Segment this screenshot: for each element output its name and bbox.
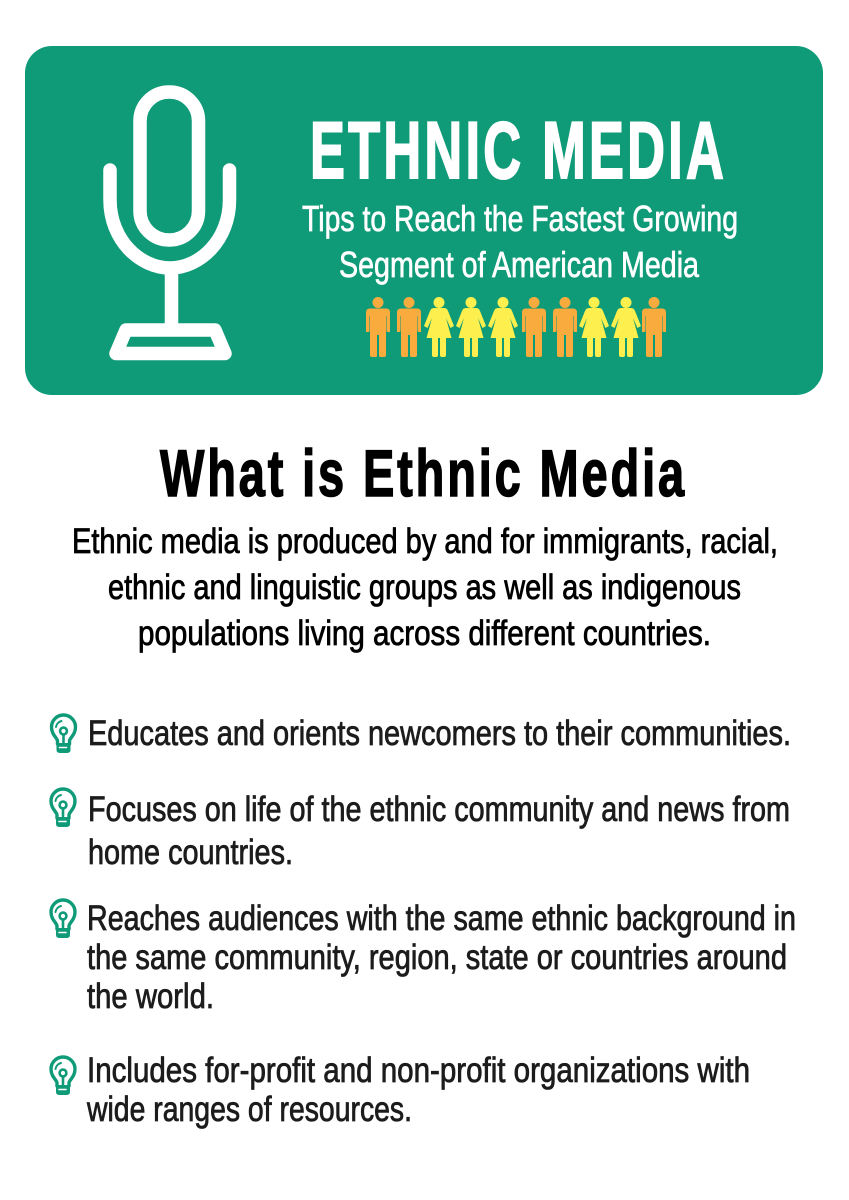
- bullet 2: home countries.: [88, 833, 293, 872]
- icon: row of people: [366, 297, 666, 357]
- panel: header banner: [25, 46, 823, 395]
- subtitle: Tips to Reach the Fastest Growing: [302, 198, 738, 239]
- bullet 4: [51, 1051, 750, 1129]
- icon: light bulb: [51, 900, 75, 937]
- subtitle: [302, 198, 738, 285]
- bullet 3: the world.: [87, 977, 214, 1016]
- icon: light bulb: [52, 715, 76, 752]
- icon: light bulb: [51, 1057, 75, 1094]
- subtitle: Segment of American Media: [339, 244, 700, 285]
- bullet 2: [51, 789, 790, 872]
- bullet 4: wide ranges of resources.: [86, 1090, 412, 1129]
- icon: microphone: [110, 92, 230, 354]
- bullet 3: [51, 899, 796, 1016]
- icon: light bulb: [51, 789, 75, 826]
- definition paragraph: [72, 522, 778, 653]
- definition paragraph: populations living across different countries.: [138, 614, 711, 653]
